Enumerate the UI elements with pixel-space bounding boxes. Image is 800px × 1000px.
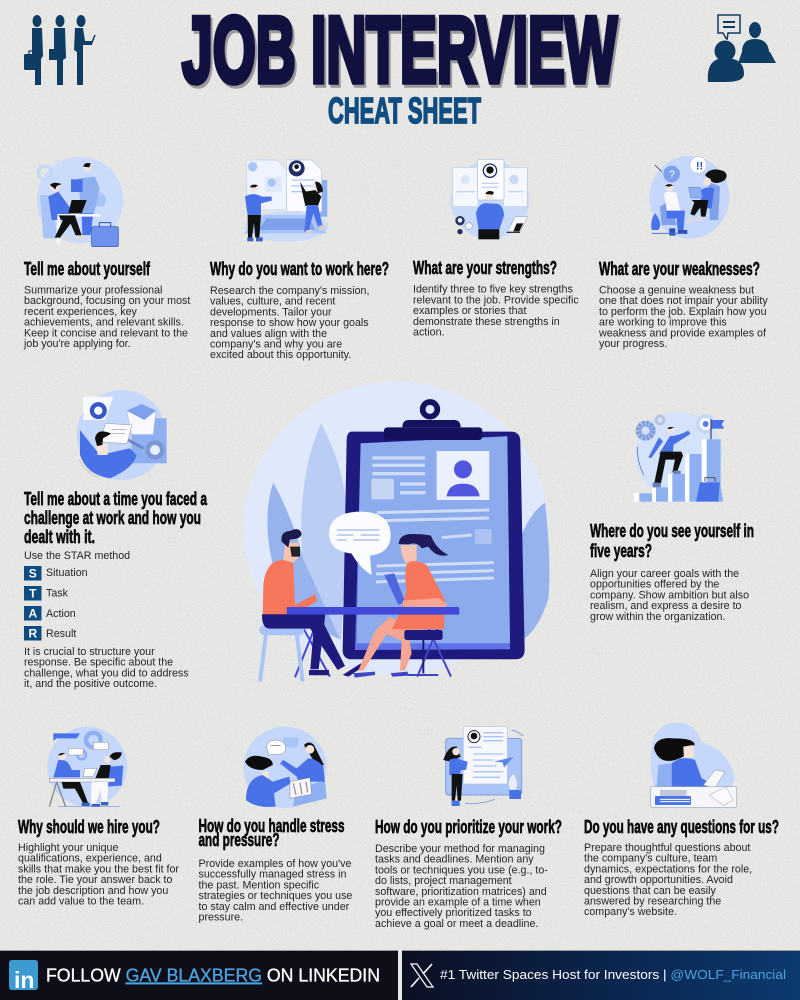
text block: Identify three to five key strengths bbox=[413, 284, 573, 296]
text block: pressure. bbox=[198, 912, 243, 924]
text block: dynamics, expectations for the role, bbox=[584, 863, 752, 875]
text block: Prepare thoughtful questions about bbox=[584, 842, 750, 854]
text block: Choose a genuine weakness but bbox=[599, 284, 754, 296]
heading: What are your strengths? bbox=[413, 258, 557, 278]
icon: two seated people talking: !! bbox=[696, 160, 703, 172]
icon: two women reviewing charts bbox=[243, 727, 327, 808]
panel: how do you prioritize your work bbox=[375, 727, 562, 930]
text block: Highlight your unique bbox=[18, 842, 118, 854]
STAR list: S bbox=[29, 566, 37, 580]
panel: tell me about a challenge bbox=[24, 390, 208, 690]
text block: action. bbox=[413, 326, 444, 338]
heading: How do you handle stress bbox=[198, 816, 344, 836]
icon: X logo bbox=[411, 964, 433, 987]
text block: Summarize your professional bbox=[24, 284, 162, 296]
heading: challenge at work and how you bbox=[24, 508, 201, 528]
text block: the past. Mention specific bbox=[198, 879, 320, 891]
panel: why should we hire you bbox=[18, 727, 179, 908]
STAR list: Action bbox=[46, 608, 76, 620]
text block: background, focusing on your most bbox=[24, 295, 190, 307]
text block: the role. Tie your answer back to bbox=[18, 874, 173, 886]
text block: achievements, and relevant skills. bbox=[24, 317, 184, 329]
text block: excited about this opportunity. bbox=[210, 349, 351, 361]
text block: demonstrate these strengths in bbox=[413, 316, 560, 328]
text block: Describe your method for managing bbox=[375, 843, 545, 855]
text block: Research the company's mission, bbox=[210, 285, 369, 297]
icon: person with gears and envelope bbox=[77, 390, 167, 480]
text block: opportunities offered by the bbox=[590, 579, 719, 591]
icon: person climbing bars to a goal bbox=[634, 412, 724, 502]
heading: and pressure? bbox=[198, 830, 280, 850]
text block: company's website. bbox=[584, 906, 677, 918]
text block: one that does not impair your ability bbox=[599, 295, 768, 307]
text block: weakness and provide examples of bbox=[598, 327, 766, 339]
heading bbox=[198, 816, 344, 850]
panel: why do you want to work here bbox=[210, 160, 389, 361]
text block: challenge, what you did to address bbox=[24, 667, 189, 679]
text block: response. Be specific about the bbox=[24, 657, 173, 669]
STAR list: R bbox=[28, 626, 37, 640]
text block: skills that make you the best fit for bbox=[18, 863, 179, 875]
panel: how do you handle stress and pressure bbox=[198, 727, 352, 924]
text block: grow within the organization. bbox=[590, 611, 725, 623]
icon: two people with profile documents bbox=[243, 160, 328, 242]
text block: company. Show ambition but also bbox=[590, 589, 749, 601]
text block: successfully managed stress in bbox=[198, 869, 346, 881]
call to action: FOLLOW GAV BLAXBERG ON LINKEDIN bbox=[46, 966, 380, 986]
text block: Keep it concise and relevant to the bbox=[24, 327, 188, 339]
panel: what are your strengths bbox=[413, 159, 579, 338]
text block: STAR intro: Use the STAR method bbox=[24, 550, 130, 562]
footer: linkedin banner bbox=[0, 950, 800, 1000]
STAR list: Task bbox=[46, 588, 69, 600]
text block: provide an example of a time when bbox=[375, 896, 541, 908]
text block: your progress. bbox=[599, 338, 667, 350]
text block: Provide examples of how you've bbox=[198, 858, 351, 870]
icon: linkedin: in bbox=[14, 967, 34, 993]
icon: linkedin bbox=[9, 960, 38, 993]
STAR list: T bbox=[29, 586, 37, 600]
tagline: #1 Twitter Spaces Host for Investors | @WOLF_Financial bbox=[440, 967, 786, 982]
icon: candidate at desk bbox=[37, 157, 123, 247]
heading: Tell me about yourself bbox=[24, 259, 151, 279]
text block: relevant to the job. Provide specific bbox=[413, 294, 579, 306]
panel: what are your weaknesses bbox=[598, 156, 768, 350]
icon: interview at a desk bbox=[47, 727, 127, 807]
heading: Tell me about a time you faced a bbox=[24, 489, 208, 509]
text block: company's and why you are bbox=[210, 338, 342, 350]
icon: two seated people talking bbox=[649, 156, 729, 239]
text block: tools or techniques you use (e.g., to- bbox=[375, 864, 548, 876]
icon: woman with checklist document bbox=[443, 727, 523, 806]
text block: developments. Tailor your bbox=[210, 306, 332, 318]
text block: questions that can be easily bbox=[584, 885, 717, 897]
text block: are working to improve this bbox=[599, 317, 727, 329]
text block: values, culture, and recent bbox=[210, 296, 335, 308]
text block: answered by researching the bbox=[584, 896, 721, 908]
subtitle: CHEAT SHEET bbox=[328, 90, 481, 131]
icon: three job candidates bbox=[24, 15, 95, 85]
panel: do you have any questions for us bbox=[584, 723, 779, 918]
STAR list: Situation bbox=[46, 567, 88, 579]
text block: response to show how your goals bbox=[210, 317, 369, 329]
text block: achieve a goal or meet a deadline. bbox=[375, 918, 538, 930]
text block: it, and the positive outcome. bbox=[24, 678, 157, 690]
heading: How do you prioritize your work? bbox=[375, 817, 562, 837]
icon: woman writing at desk with books bbox=[651, 723, 737, 807]
icon: candidate with profile cards bbox=[451, 159, 529, 239]
text block: qualifications, experience, and bbox=[18, 853, 162, 865]
text block: do lists, project management bbox=[375, 875, 512, 887]
STAR list: Result bbox=[46, 628, 76, 640]
text block: and growth opportunities. Avoid bbox=[584, 874, 733, 886]
heading: dealt with it. bbox=[24, 527, 95, 547]
panel: where do you see yourself in five years bbox=[590, 412, 754, 623]
text block: strategies or techniques you use bbox=[198, 890, 352, 902]
heading: Why do you want to work here? bbox=[210, 259, 389, 279]
text block: Align your career goals with the bbox=[590, 568, 739, 580]
text block: to stay calm and effective under bbox=[198, 901, 350, 913]
text block: recent experiences, key bbox=[24, 306, 138, 318]
heading bbox=[590, 521, 754, 561]
text block: the company's culture, team bbox=[584, 853, 717, 865]
panel: tell me about yourself bbox=[23, 157, 190, 350]
heading: Why should we hire you? bbox=[18, 817, 160, 837]
text block: It is crucial to structure your bbox=[24, 646, 155, 658]
STAR list bbox=[24, 566, 88, 640]
text block: to perform the job. Explain how you bbox=[599, 306, 767, 318]
text block: realism, and express a desire to bbox=[590, 600, 742, 612]
text block: tasks and deadlines. Mention any bbox=[375, 854, 534, 866]
footer: twitter banner bbox=[402, 951, 800, 1000]
text block: examples or stories that bbox=[413, 305, 526, 317]
text block: the job description and how you bbox=[18, 885, 168, 897]
text block: software, prioritization matrices) and bbox=[375, 886, 547, 898]
text block: you effectively prioritized tasks to bbox=[375, 907, 532, 919]
central illustration: interview in front of a giant resume clipboard bbox=[243, 382, 549, 682]
heading bbox=[24, 489, 208, 547]
text block: job you're applying for. bbox=[23, 338, 131, 350]
text block: and values align with the bbox=[210, 328, 327, 340]
text block: can add value to the team. bbox=[18, 896, 144, 908]
STAR list: A bbox=[28, 606, 37, 620]
heading: five years? bbox=[590, 541, 652, 561]
icon: interview meeting bbox=[708, 15, 776, 82]
icon: two seated people talking: ? bbox=[669, 169, 675, 181]
